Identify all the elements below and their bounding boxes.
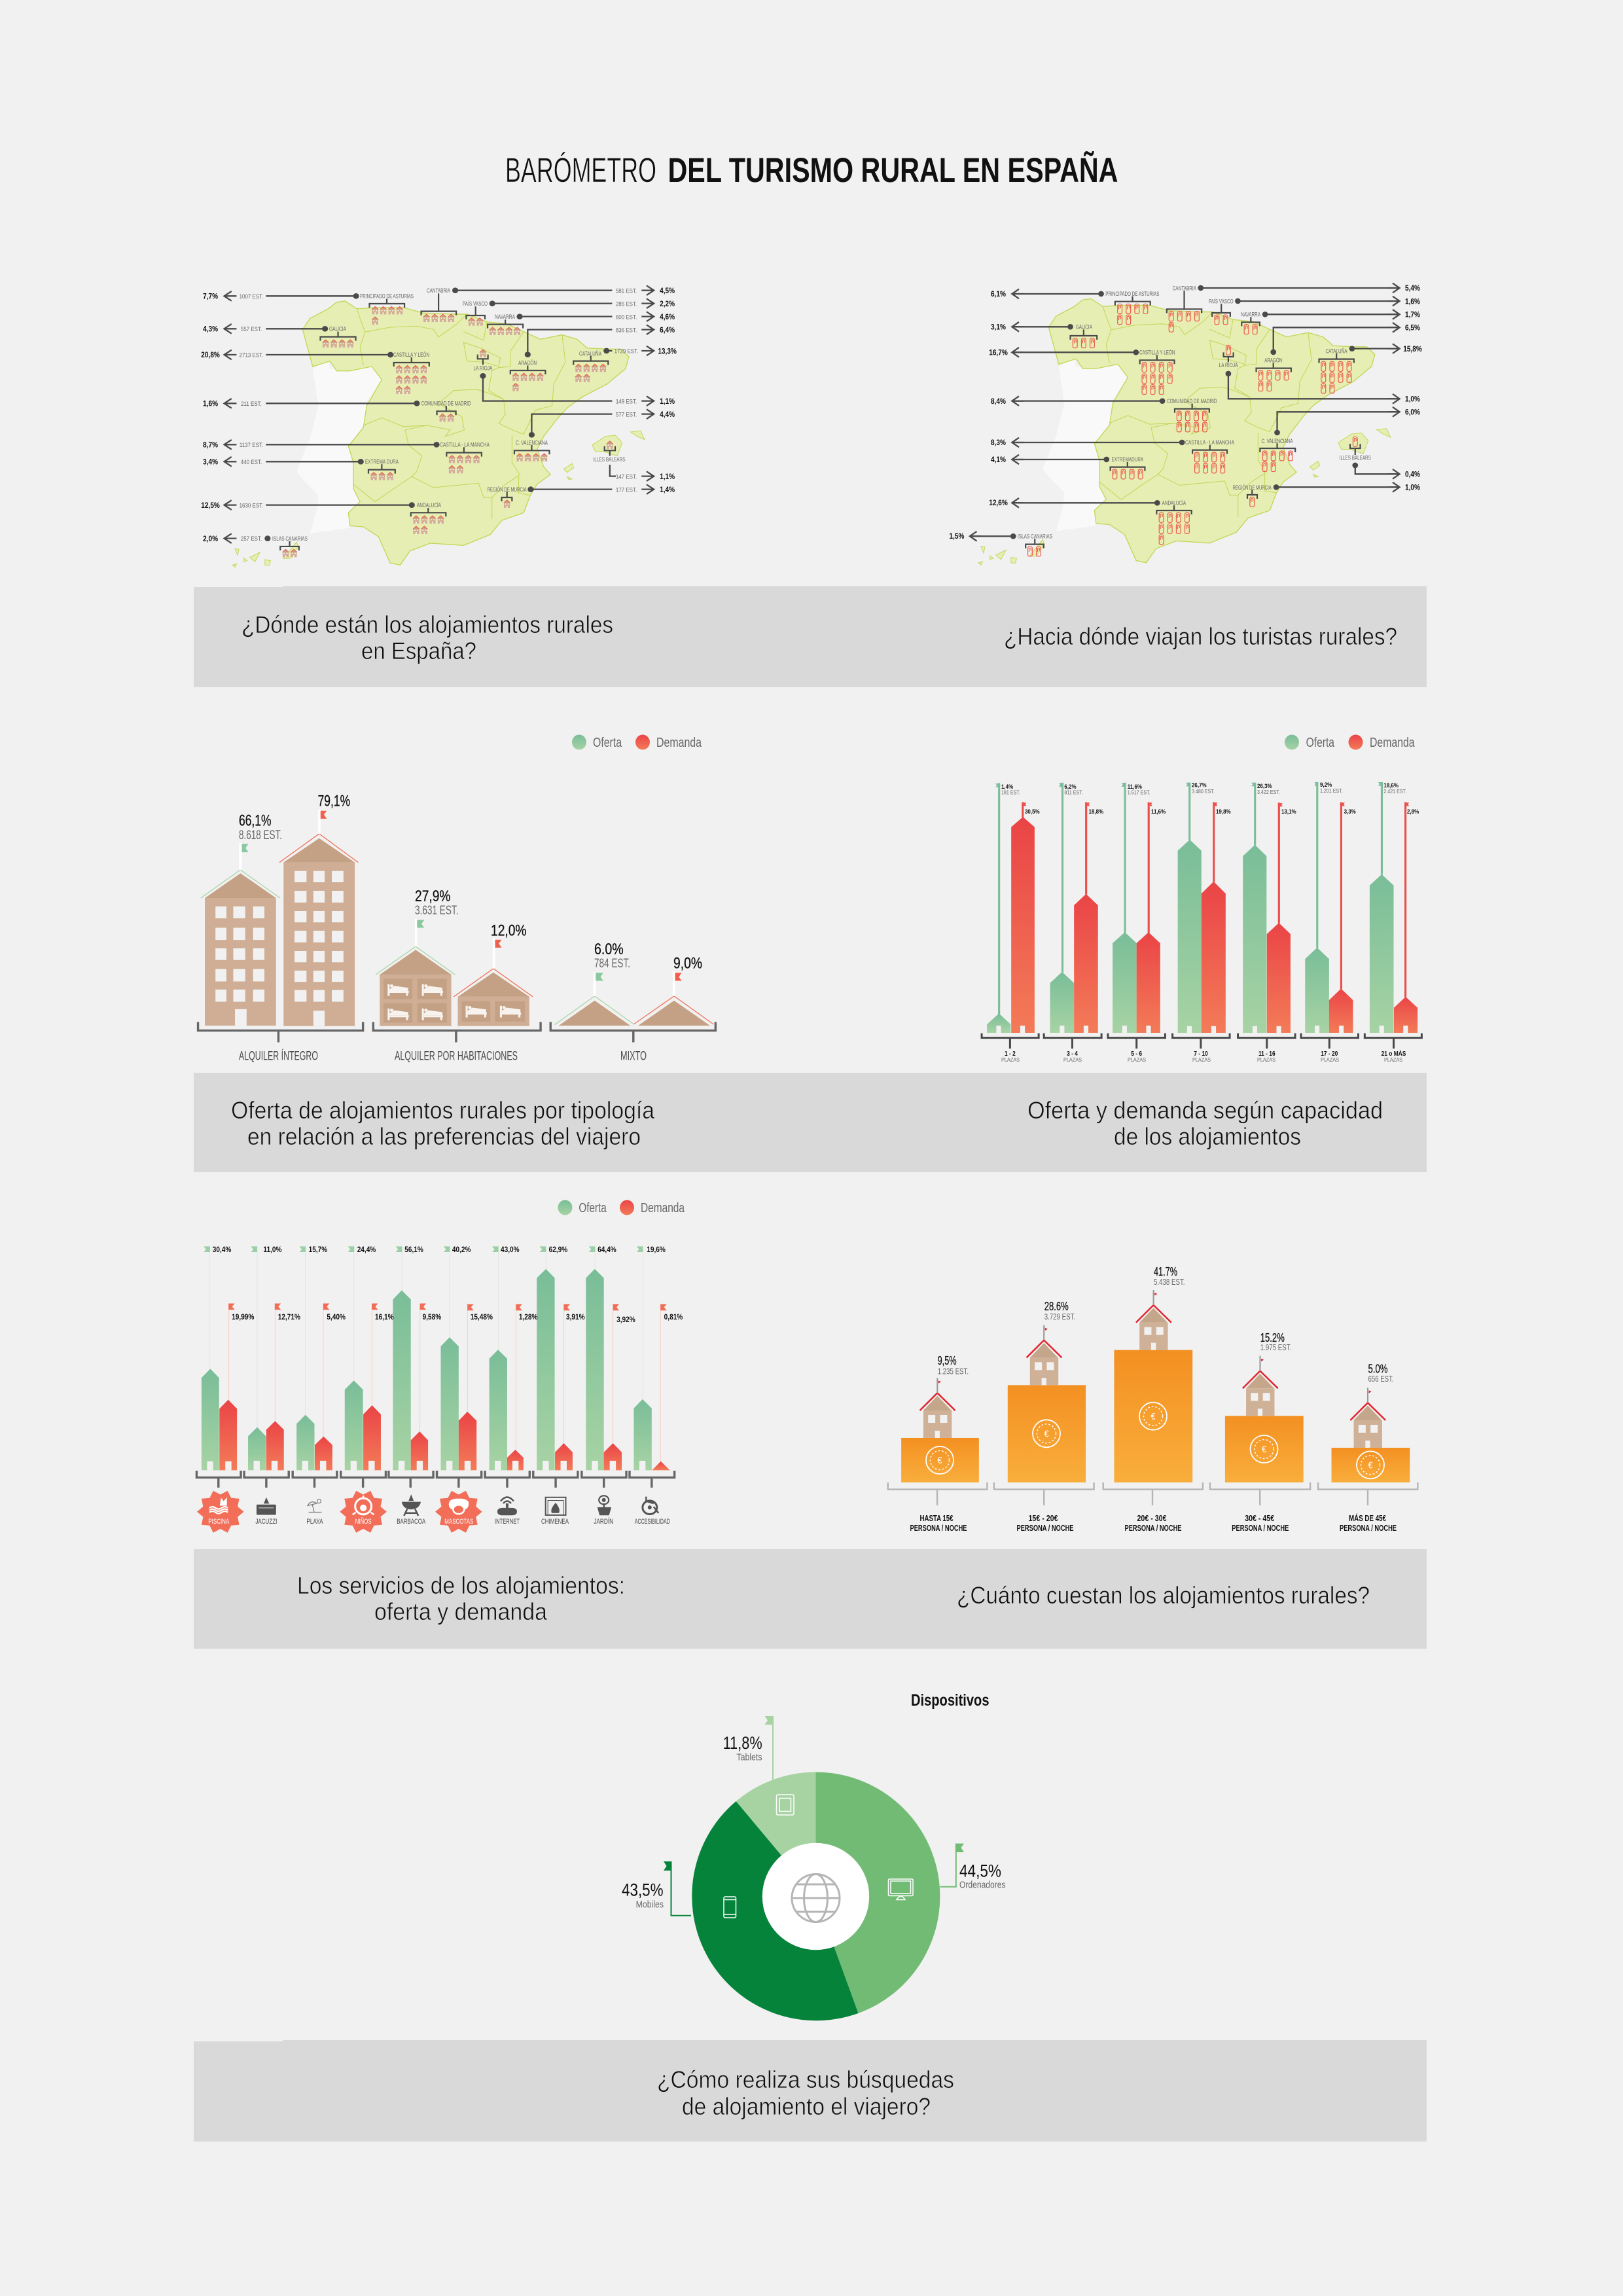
heading: offer and demand by capacity: Oferta y demanda según capacidad	[1027, 1097, 1383, 1124]
map: where tourists travel: 6,0%	[1405, 408, 1420, 417]
chart: capacity bars: 3.480 EST.	[1192, 788, 1215, 795]
map: accommodations in Spain: ARAGÓN	[518, 360, 537, 367]
chart: services: BARBACOA	[397, 1518, 426, 1526]
heading: where are the accommodations	[241, 611, 613, 664]
callout: computers: Ordenadores	[959, 1880, 1005, 1890]
map: accommodations in Spain: NAVARRA	[495, 314, 515, 320]
chart: services: 30,4%	[213, 1246, 232, 1254]
heading: services	[297, 1572, 625, 1625]
map: accommodations in Spain: ANDALUCÍA	[417, 502, 441, 509]
chart: capacity bars: 11,6%	[1151, 808, 1166, 815]
chart: services: 43,0%	[501, 1246, 520, 1254]
chart: typology buildings: MIXTO	[620, 1050, 647, 1063]
icon: tablet	[776, 1795, 794, 1815]
heading: services: oferta y demanda	[374, 1598, 547, 1625]
band: row 2	[194, 1073, 1427, 1172]
chart: prices: PERSONA / NOCHE	[1017, 1523, 1074, 1533]
chart: prices: PERSONA / NOCHE	[1340, 1523, 1397, 1533]
donut centre	[762, 1843, 869, 1950]
chart: capacity bars: 17 - 20	[1321, 1050, 1338, 1057]
callout: mobiles: 43,5%	[622, 1880, 664, 1899]
chart: capacity bars: 1.201 EST.	[1320, 787, 1343, 794]
chart: prices: 41.7%	[1154, 1265, 1177, 1278]
map: where tourists travel: CATALUÑA	[1326, 348, 1347, 355]
map: where tourists travel: ANDALUCÍA	[1162, 500, 1186, 507]
map: accommodations in Spain: PAÍS VASCO	[463, 300, 488, 307]
map: accommodations in Spain: 4,5%	[660, 287, 675, 295]
chart: capacity bars: 26,7%	[1192, 781, 1207, 789]
map: where tourists travel: 0,4%	[1405, 471, 1420, 479]
slice: computers	[815, 1772, 940, 2013]
chart: capacity bars: PLAZAS	[1063, 1056, 1082, 1063]
heading: where do tourists travel: ¿Hacia dónde viajan los turistas rurales?	[1004, 623, 1397, 650]
map: where tourists travel: 1,0%	[1405, 484, 1420, 492]
chart: capacity bars: 11 - 16	[1258, 1050, 1275, 1057]
map: accommodations in Spain: 13,3%	[658, 348, 677, 356]
map: accommodations in Spain: REGIÓN DE MURCIA	[488, 486, 527, 493]
chart: services: 40,2%	[452, 1246, 471, 1254]
heading: where are the accommodations: ¿Dónde están los alojamientos rurales	[241, 611, 613, 638]
chart: prices: PERSONA / NOCHE	[1124, 1523, 1182, 1533]
chart: capacity bars: 7 - 10	[1194, 1050, 1208, 1057]
map: accommodations in Spain: 581 EST.	[616, 287, 637, 295]
legend: services offer and demand: Demanda	[641, 1201, 685, 1215]
chart: services: 1,28%	[519, 1313, 538, 1321]
icon: euro coins	[926, 1403, 1384, 1479]
chart: capacity bars: 811 EST.	[1064, 789, 1083, 796]
map: where tourists travel: 8,4%	[991, 397, 1006, 406]
chart: prices: €	[1368, 1459, 1373, 1471]
chart: capacity bars: 21 o MÁS	[1382, 1049, 1406, 1057]
callout: computers	[940, 1844, 1005, 1890]
heading: devices	[657, 2066, 954, 2120]
icon: pets badge	[435, 1491, 482, 1533]
map: where tourists travel: GALICIA	[1076, 323, 1092, 330]
callout: mobiles: Mobiles	[636, 1899, 664, 1910]
slice: tablets	[736, 1772, 815, 1897]
heading: prices: ¿Cuánto cuestan los alojamientos rurales?	[957, 1582, 1370, 1609]
chart: typology buildings	[198, 734, 715, 1063]
band: row 1	[194, 586, 1427, 687]
chart: capacity bars: 9,2%	[1320, 781, 1332, 788]
chart: services: 24,4%	[357, 1246, 376, 1254]
map: accommodations in Spain: LA RIOJA	[474, 365, 492, 372]
map: where tourists travel: 1,6%	[1405, 298, 1420, 306]
icon: monitor	[889, 1879, 913, 1899]
band: row 3	[194, 1549, 1427, 1649]
chart: services: 5,40%	[327, 1313, 346, 1321]
chart: typology buildings: 6.0%	[594, 941, 624, 958]
heading: offer and demand by capacity	[1027, 1097, 1383, 1150]
map: accommodations in Spain: 577 EST.	[616, 411, 637, 418]
map: where tourists travel: 1,5%	[950, 532, 965, 541]
chart: services: 15,48%	[471, 1313, 493, 1321]
title: BARÓMETRO	[505, 151, 656, 190]
map: accommodations in Spain: 8,7%	[203, 441, 218, 450]
chart: services: 3,91%	[566, 1313, 585, 1321]
chart: typology buildings: 27,9%	[415, 888, 450, 905]
chart: prices: 20€ - 30€	[1137, 1513, 1166, 1523]
chart: prices: 5.438 EST.	[1154, 1277, 1185, 1287]
chart: prices: €	[1151, 1410, 1156, 1422]
map: accommodations in Spain: CASTILLA Y LEÓN	[393, 351, 429, 358]
chart: prices: 5.0%	[1368, 1363, 1387, 1376]
icon: phone	[724, 1897, 736, 1918]
map: accommodations in Spain: 1,1%	[660, 397, 675, 406]
map: where tourists travel: 12,6%	[989, 499, 1008, 507]
map: where tourists travel: 3,1%	[991, 323, 1006, 332]
map: where tourists travel: 8,3%	[991, 439, 1006, 447]
map: where tourists travel: CASTILLA Y LEÓN	[1139, 350, 1175, 356]
chart: capacity bars: PLAZAS	[1192, 1056, 1211, 1063]
title: DEL TURISMO RURAL EN ESPAÑA	[668, 151, 1118, 190]
chart: services: 11,0%	[263, 1246, 282, 1254]
chart: capacity bars: 2.421 EST.	[1383, 788, 1406, 795]
chart: services: 9,58%	[423, 1313, 441, 1321]
chart: services: MASCOTAS	[444, 1518, 473, 1526]
map: accommodations in Spain: 557 EST.	[241, 325, 262, 332]
chart: capacity bars: 11,6%	[1128, 783, 1142, 790]
chart: capacity bars: PLAZAS	[1001, 1056, 1020, 1063]
chart: typology buildings: ALQUILER POR HABITACIONES	[395, 1050, 518, 1063]
callout: mobiles	[622, 1861, 691, 1916]
map: accommodations in Spain: 4,3%	[203, 325, 218, 334]
chart: services: 16,1%	[375, 1313, 394, 1321]
map: accommodations in Spain: 440 EST.	[241, 458, 262, 465]
chart: prices: PERSONA / NOCHE	[1232, 1523, 1289, 1533]
chart: capacity bars: 5 - 6	[1131, 1050, 1142, 1057]
map: accommodations in Spain: 149 EST.	[616, 398, 637, 405]
heading: offer by typology	[231, 1097, 654, 1150]
map: where tourists travel: REGIÓN DE MURCIA	[1233, 484, 1272, 491]
chart: services: INTERNET	[495, 1518, 520, 1526]
map: accommodations in Spain: PRINCIPADO DE ASTURIAS	[360, 293, 414, 300]
map: accommodations in Spain: C. VALENCIANA	[516, 440, 548, 446]
chart: services: JARDÍN	[594, 1517, 613, 1526]
map: accommodations in Spain: 211 EST.	[241, 400, 262, 407]
map: accommodations in Spain: 2713 EST.	[240, 351, 263, 359]
chart: services: PISCINA	[208, 1518, 230, 1526]
chart: services: 64,4%	[597, 1246, 616, 1254]
chart: services: 62,9%	[549, 1246, 567, 1254]
chart: prices: 656 EST.	[1368, 1374, 1394, 1384]
map: accommodations in Spain: ILLES BALEARS	[593, 456, 626, 463]
chart: services: 3,92%	[616, 1316, 635, 1324]
map: accommodations in Spain: 1137 EST.	[240, 441, 263, 448]
map: accommodations in Spain: 1630 EST.	[240, 502, 263, 509]
callout: tablets: Tablets	[737, 1751, 762, 1763]
map: where tourists travel: 1,7%	[1405, 311, 1420, 319]
chart: capacity bars: 1 - 2	[1005, 1050, 1016, 1057]
map: accommodations in Spain: 1,1%	[660, 473, 675, 481]
chart: prices: MÁS DE 45€	[1349, 1513, 1386, 1523]
map: accommodations in Spain: CATALUÑA	[579, 351, 601, 357]
heading: offer and demand by capacity: de los alojamientos	[1114, 1123, 1301, 1150]
chart: services: CHIMENEA	[541, 1518, 569, 1526]
heading: services: Los servicios de los alojamientos:	[297, 1572, 625, 1599]
map: accommodations in Spain: 147 EST.	[616, 473, 637, 480]
map: accommodations in Spain: 4,6%	[660, 313, 675, 321]
map: where tourists travel: 4,1%	[991, 456, 1006, 464]
map: accommodations in Spain: 7,7%	[203, 293, 218, 301]
chart: prices: €	[938, 1454, 942, 1465]
chart: prices: 1.975 EST.	[1260, 1342, 1291, 1352]
map: accommodations in Spain: 600 EST.	[616, 314, 637, 321]
chart: capacity bars: 3.422 EST.	[1257, 789, 1280, 795]
chart: typology buildings: 12,0%	[491, 922, 526, 940]
map: accommodations in Spain: 3,4%	[203, 458, 218, 467]
map: accommodations in Spain: 4,4%	[660, 410, 675, 419]
chart: typology buildings: ALQUILER ÍNTEGRO	[239, 1050, 318, 1063]
chart: capacity bars: 3 - 4	[1067, 1050, 1079, 1057]
chart: capacity bars: 3,3%	[1344, 808, 1356, 815]
map: accommodations in Spain: 6,4%	[660, 326, 675, 334]
callout: tablets	[723, 1716, 774, 1780]
icon: garden	[597, 1496, 611, 1515]
chart: capacity bars: 1,4%	[1001, 783, 1013, 790]
icon: internet	[497, 1498, 517, 1515]
map: where tourists travel: CASTILLA - LA MANCHA	[1185, 439, 1234, 446]
map: accommodations in Spain: CANTABRIA	[427, 287, 450, 294]
map: where tourists travel: EXTREMADURA	[1111, 456, 1143, 463]
map: accommodations in Spain: 1,6%	[203, 400, 218, 408]
map: accommodations in Spain: CASTILLA - LA MANCHA	[440, 441, 490, 448]
legend: services offer and demand: Oferta	[579, 1201, 607, 1215]
legend: capacity offer and demand: Demanda	[1370, 736, 1415, 750]
map: where tourists travel: ILLES BALEARS	[1340, 454, 1371, 461]
heading: offer by typology: Oferta de alojamientos rurales por tipología	[231, 1097, 654, 1124]
chart: services: ACCESIBILIDAD	[635, 1518, 670, 1526]
map: accommodations in Spain: COMUNIDAD DE MADRID	[421, 401, 471, 407]
legend: offer and demand	[572, 734, 702, 750]
legend: capacity offer and demand: Oferta	[1306, 736, 1335, 750]
map: where tourists travel: ARAGÓN	[1264, 357, 1282, 364]
map: accommodations in Spain: 20,8%	[201, 351, 220, 359]
map: accommodations in Spain: 1007 EST.	[240, 293, 263, 300]
chart: capacity bars: 13,1%	[1281, 808, 1296, 815]
chart: prices: PERSONA / NOCHE	[910, 1523, 967, 1533]
chart: prices	[888, 1265, 1418, 1533]
icon: fireplace	[546, 1498, 565, 1515]
map: where tourists travel: 1,0%	[1405, 395, 1420, 404]
map: accommodations in Spain: 177 EST.	[616, 486, 637, 493]
callout: tablets: 11,8%	[723, 1733, 762, 1753]
chart: capacity bars: 2,8%	[1407, 808, 1419, 815]
chart: typology buildings: 66,1%	[239, 812, 271, 830]
chart: capacity bars: PLAZAS	[1128, 1056, 1146, 1063]
callout: computers: 44,5%	[959, 1861, 1001, 1881]
heading: offer by typology: en relación a las preferencias del viajero	[247, 1123, 641, 1150]
map: where tourists travel: ISLAS CANARIAS	[1018, 533, 1052, 539]
chart: services: 56,1%	[404, 1246, 423, 1254]
map: where tourists travel: COMUNIDAD DE MADRID	[1167, 398, 1217, 404]
heading: devices: de alojamiento el viajero?	[682, 2093, 931, 2120]
legend: offer and demand: Oferta	[593, 736, 622, 750]
map: accommodations in Spain: 2,0%	[203, 535, 218, 543]
chart: typology buildings: 79,1%	[318, 792, 350, 810]
chart: capacity bars: 18,8%	[1089, 808, 1103, 815]
chart: prices: 28.6%	[1044, 1300, 1069, 1313]
chart: prices: 3.729 EST.	[1044, 1312, 1075, 1321]
map: accommodations in Spain	[201, 285, 677, 567]
chart: devices donut	[622, 1691, 1005, 2020]
map: where tourists travel	[950, 283, 1422, 565]
map: accommodations in Spain: 2,2%	[660, 300, 675, 308]
map: accommodations in Spain: 285 EST.	[616, 300, 637, 308]
chart: capacity bars: 6,2%	[1064, 783, 1077, 790]
icon: children badge	[340, 1491, 387, 1533]
title: devices: Dispositivos	[911, 1691, 990, 1710]
map: accommodations in Spain: ISLAS CANARIAS	[272, 535, 308, 542]
chart: prices: 15€ - 20€	[1029, 1513, 1058, 1523]
chart: prices: 1.235 EST.	[938, 1367, 969, 1376]
map: where tourists travel: LA RIOJA	[1219, 362, 1238, 368]
map: accommodations in Spain: 257 EST.	[241, 535, 262, 542]
map: accommodations in Spain: GALICIA	[329, 326, 346, 332]
map: where tourists travel: NAVARRA	[1241, 312, 1260, 318]
chart: services: 19,99%	[232, 1313, 255, 1321]
chart: services: 12,71%	[278, 1313, 300, 1321]
chart: capacity bars	[982, 734, 1421, 1063]
chart: prices: HASTA 15€	[920, 1513, 953, 1523]
icon: accessibility	[643, 1497, 658, 1515]
legend: capacity offer and demand	[1285, 734, 1415, 750]
icon: jacuzzi	[257, 1498, 276, 1515]
map: where tourists travel: 15,8%	[1403, 345, 1422, 353]
chart: capacity bars: 18,6%	[1383, 781, 1399, 789]
chart: typology buildings: 784 EST.	[594, 957, 630, 971]
chart: services	[196, 1200, 685, 1533]
chart: services: PLAYA	[306, 1518, 323, 1526]
chart: capacity bars: PLAZAS	[1257, 1056, 1275, 1063]
slice: mobiles	[692, 1801, 859, 2020]
chart: services: NIÑOS	[355, 1517, 372, 1526]
chart: capacity bars: PLAZAS	[1321, 1056, 1339, 1063]
legend: services offer and demand	[558, 1200, 685, 1215]
chart: prices: 30€ - 45€	[1245, 1513, 1274, 1523]
chart: capacity bars: 30,5%	[1025, 808, 1040, 815]
map: where tourists travel: 6,1%	[991, 290, 1006, 298]
chart: services: JACUZZI	[255, 1518, 277, 1526]
chart: services: 15,7%	[309, 1246, 327, 1254]
chart: typology buildings: 3.631 EST.	[415, 904, 458, 918]
icon: beach	[308, 1499, 321, 1512]
legend: offer and demand: Demanda	[656, 736, 702, 750]
chart: capacity bars: 181 EST.	[1001, 789, 1020, 796]
map: where tourists travel: PAÍS VASCO	[1209, 298, 1234, 305]
chart: capacity bars: 1.517 EST.	[1128, 789, 1150, 796]
chart: prices: 9,5%	[938, 1354, 957, 1367]
title	[505, 151, 1118, 190]
heading: where are the accommodations: en España?	[361, 637, 476, 664]
icon: globe	[792, 1874, 840, 1922]
map: accommodations in Spain: 1,4%	[660, 486, 675, 494]
map: where tourists travel: 6,5%	[1405, 324, 1420, 332]
chart: prices: €	[1262, 1443, 1266, 1454]
map: where tourists travel: 5,4%	[1405, 284, 1420, 293]
map: where tourists travel: 16,7%	[989, 349, 1008, 357]
icon: barbecue	[402, 1494, 421, 1516]
chart: capacity bars: PLAZAS	[1384, 1056, 1402, 1063]
icon: pool badge	[197, 1491, 244, 1533]
chart: capacity bars: 26,3%	[1257, 782, 1272, 789]
chart: services: 19,6%	[647, 1246, 666, 1254]
chart: typology buildings: 8.618 EST.	[239, 829, 282, 842]
band: row 4	[194, 2040, 1427, 2142]
chart: prices: 15.2%	[1260, 1331, 1285, 1344]
map: accommodations in Spain: EXTREMA DURA	[365, 458, 399, 465]
chart: services: 0,81%	[664, 1313, 683, 1321]
map: where tourists travel: CANTABRIA	[1173, 285, 1196, 292]
chart: prices: €	[1044, 1427, 1049, 1439]
map: accommodations in Spain: 12,5%	[201, 501, 220, 510]
map: where tourists travel: PRINCIPADO DE ASTURIAS	[1105, 291, 1159, 297]
heading: devices: ¿Cómo realiza sus búsquedas	[657, 2066, 954, 2093]
chart: typology buildings: 9,0%	[673, 954, 702, 973]
chart: capacity bars: 19,8%	[1216, 808, 1231, 815]
map: where tourists travel: C. VALENCIANA	[1262, 438, 1293, 444]
map: accommodations in Spain: 836 EST.	[616, 327, 637, 334]
map: accommodations in Spain: 1729 EST.	[615, 348, 638, 355]
